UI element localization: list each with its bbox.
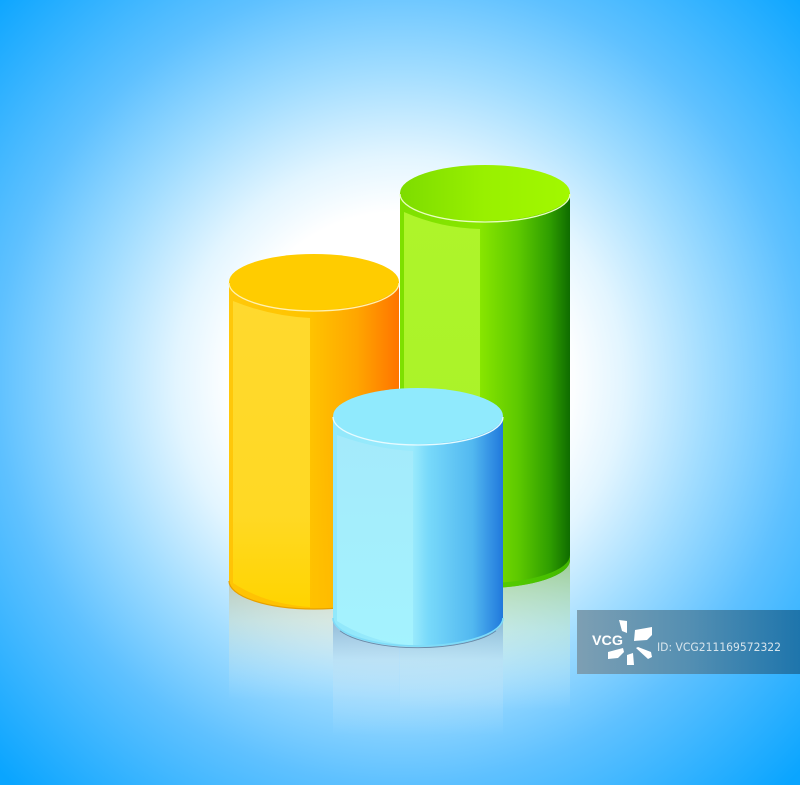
green side highlight <box>404 212 480 584</box>
bar: orange cylinder <box>229 254 399 609</box>
blue side highlight <box>337 435 413 646</box>
green base rim <box>400 555 570 588</box>
orange top rim light <box>229 283 399 311</box>
green top ellipse <box>400 165 570 221</box>
watermark ID text: ID: VCG211169572322 <box>657 641 781 654</box>
watermark badge <box>577 610 800 674</box>
green top rim light <box>400 194 570 222</box>
orange top ellipse <box>229 254 399 310</box>
floor reflections <box>229 550 570 735</box>
blue top ellipse <box>333 388 503 444</box>
orange base edge <box>229 581 399 609</box>
orange side highlight <box>233 301 310 607</box>
watermark logo: starburst <box>608 620 652 665</box>
bar: blue cylinder (shortest) <box>333 388 503 648</box>
watermark logo text: VCG <box>592 632 623 648</box>
blue base rim <box>333 618 503 646</box>
blue top rim light <box>333 417 503 445</box>
bar: green cylinder (tallest) <box>400 165 570 588</box>
orange lower fade <box>229 440 399 609</box>
blue base dark edge <box>340 631 496 648</box>
